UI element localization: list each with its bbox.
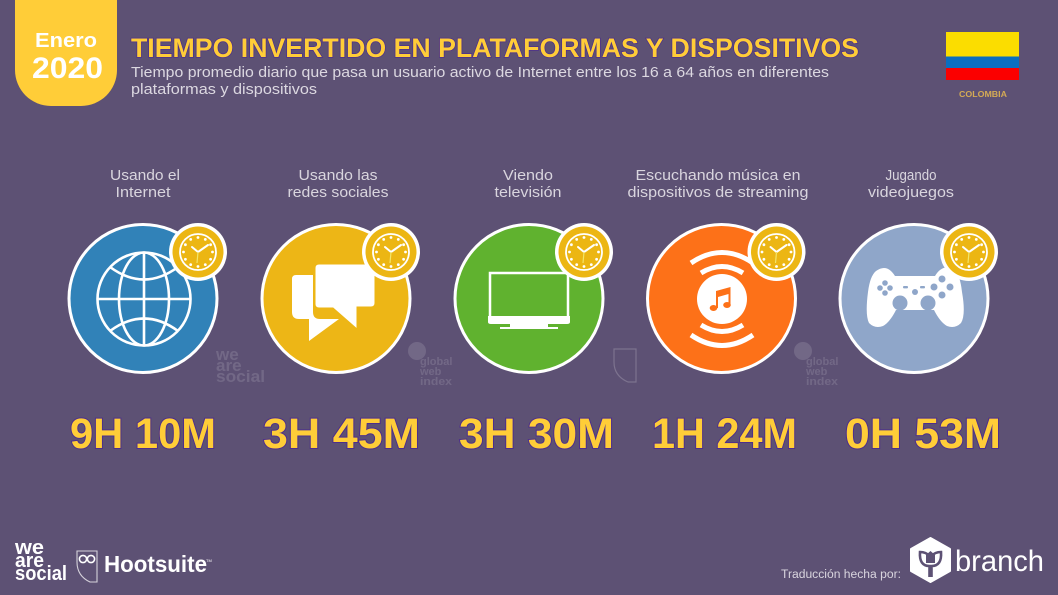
- value: internet: 9H 10M: [70, 410, 216, 458]
- value: music streaming: 1H 24M: [652, 410, 797, 458]
- label: Usando las redes sociales: [288, 168, 388, 201]
- watermark: global web index: [794, 342, 839, 388]
- subtitle: [131, 65, 829, 98]
- label: Escuchando música: Escuchando música en: [636, 168, 800, 184]
- label: Escuchando música: dispositivos de streaming: [628, 185, 808, 201]
- logo: Hootsuite: TM: [206, 558, 212, 563]
- logo: we are social: are: [15, 550, 44, 572]
- label: Usando el Internet: Usando el: [110, 168, 180, 184]
- label: Escuchando música: [628, 168, 808, 201]
- icon: chat bubbles: [262, 223, 420, 372]
- label: Usando el Internet: [110, 168, 180, 201]
- watermark: global web index: [408, 342, 453, 388]
- icon: television: [455, 223, 613, 372]
- title: TIEMPO INVERTIDO EN PLATAFORMAS Y DISPOSITIVOS: [131, 33, 859, 63]
- date tab: Enero: [35, 29, 97, 52]
- logo: Hootsuite: [77, 551, 212, 582]
- value: social media: 3H 45M: [263, 410, 420, 458]
- label: Viendo televisión: Viendo: [503, 168, 553, 184]
- watermark: owl: [614, 349, 636, 382]
- value: video games: 0H 53M: [845, 410, 1001, 458]
- watermark: global web index: global: [420, 356, 452, 368]
- watermark: global web index: index: [806, 376, 839, 388]
- flag: Colombia: COLOMBIA: [959, 89, 1007, 99]
- flag: Colombia: [946, 32, 1019, 99]
- watermark: we are social: we: [215, 345, 239, 364]
- logo: we are social: [14, 537, 67, 585]
- icon: music streaming: [648, 223, 806, 372]
- icon: globe: [69, 223, 227, 372]
- value: television: 3H 30M: [459, 410, 614, 458]
- watermark: we are social: social: [216, 367, 265, 386]
- date tab: 2020: [32, 52, 103, 85]
- logo: branch: branch: [955, 545, 1044, 578]
- watermark: global web index: global: [806, 356, 838, 368]
- logo: we are social: we: [14, 537, 44, 559]
- label: Usando las redes sociales: Usando las: [298, 168, 378, 184]
- label: Usando las redes sociales: redes sociales: [288, 185, 388, 201]
- label: Jugando videojuegos: [868, 168, 954, 201]
- logo: branch: [911, 538, 1044, 582]
- watermark: global web index: web: [805, 366, 828, 378]
- subtitle: plataformas y dispositivos: [131, 82, 317, 98]
- watermark: global web index: index: [420, 376, 453, 388]
- date tab: [15, 0, 117, 106]
- label: Viendo televisión: [494, 168, 562, 201]
- label: Jugando videojuegos: Jugando: [886, 168, 936, 184]
- icon: game controller: [840, 223, 998, 372]
- logo: Hootsuite: Hootsuite: [104, 551, 207, 577]
- watermark: we are social: are: [216, 356, 242, 375]
- credit text: Traducción hecha por:: [781, 569, 901, 581]
- label: Jugando videojuegos: videojuegos: [868, 185, 954, 201]
- logo: we are social: social: [15, 563, 67, 585]
- label: Usando el Internet: Internet: [116, 185, 170, 201]
- watermark: we are social: [215, 345, 265, 386]
- watermark: global web index: web: [419, 366, 442, 378]
- label: Viendo televisión: televisión: [494, 185, 562, 201]
- subtitle: Tiempo promedio diario que pasa un usuario activo de Internet entre los 16 a 64 años en diferentes: [131, 65, 829, 81]
